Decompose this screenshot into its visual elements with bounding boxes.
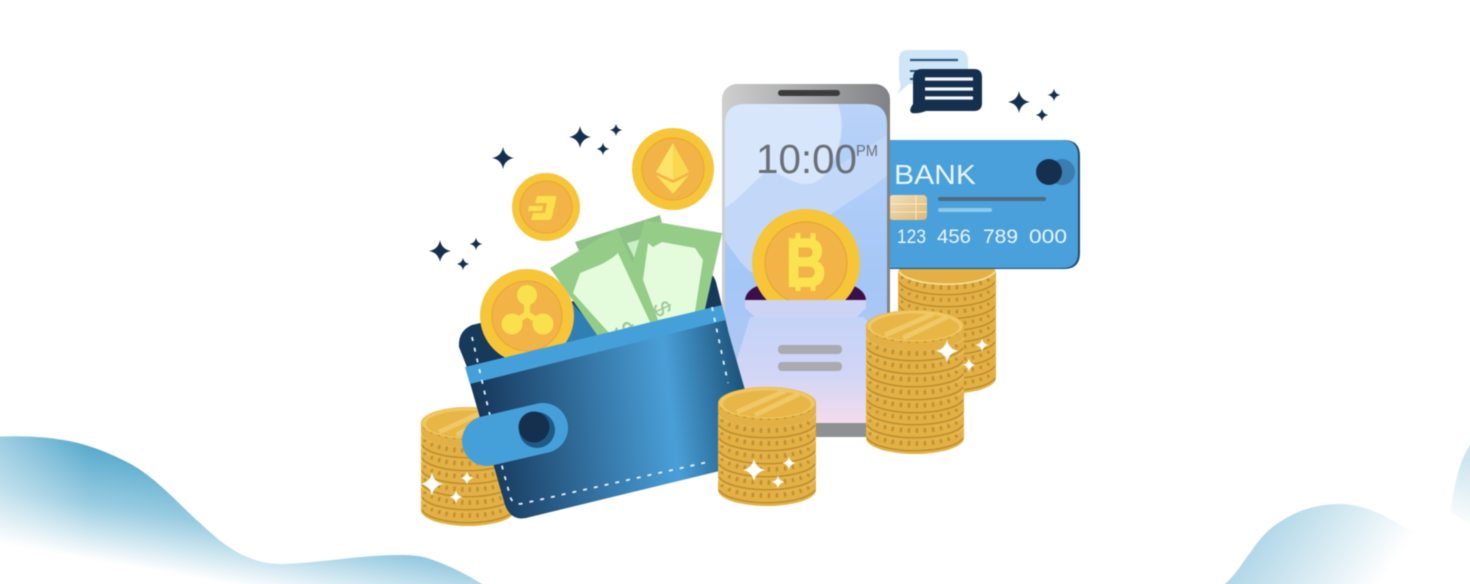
right background waves [1215, 436, 1470, 584]
wallet front [470, 320, 765, 518]
card brand circles [1036, 159, 1075, 185]
coin stack: behind card [898, 257, 996, 394]
bank card [880, 140, 1080, 269]
phone buttons text lines [778, 345, 842, 371]
stitching [472, 307, 728, 504]
bitcoin coin: B [786, 225, 826, 301]
smartphone [722, 84, 890, 437]
banknotes: $ [647, 297, 677, 321]
card number: 123 [897, 226, 926, 248]
chat bubbles [897, 50, 982, 113]
dash coin [512, 173, 580, 241]
wallet band [465, 305, 726, 384]
screen lower panel [725, 317, 887, 423]
clock PM: PM [856, 143, 878, 160]
phone speaker [778, 90, 840, 96]
left background wave [0, 436, 494, 584]
banknotes: $ [607, 316, 642, 347]
card number: 456 [937, 226, 971, 248]
wallet [459, 215, 765, 518]
bitcoin coin [751, 208, 861, 301]
card label: BANK [894, 159, 976, 190]
white coin sparkles [420, 338, 988, 504]
wallet clasp [487, 412, 555, 448]
clock time: 10:00 [756, 136, 857, 182]
wallet inner pocket [560, 298, 606, 356]
coin stack: front [718, 387, 816, 506]
card number: 789 [983, 226, 1018, 248]
coin stack: tall centre [866, 310, 964, 454]
banknotes [550, 215, 722, 347]
card chip [889, 195, 927, 220]
coin stack: left [421, 407, 515, 526]
card number [897, 226, 1067, 248]
dark sparkle stars [429, 89, 1060, 270]
card strip lines [940, 199, 1044, 210]
ripple coin [480, 269, 574, 363]
coin slot [745, 285, 866, 318]
ethereum coin [632, 128, 714, 210]
wallet back [459, 271, 728, 400]
card number: 000 [1029, 226, 1067, 248]
